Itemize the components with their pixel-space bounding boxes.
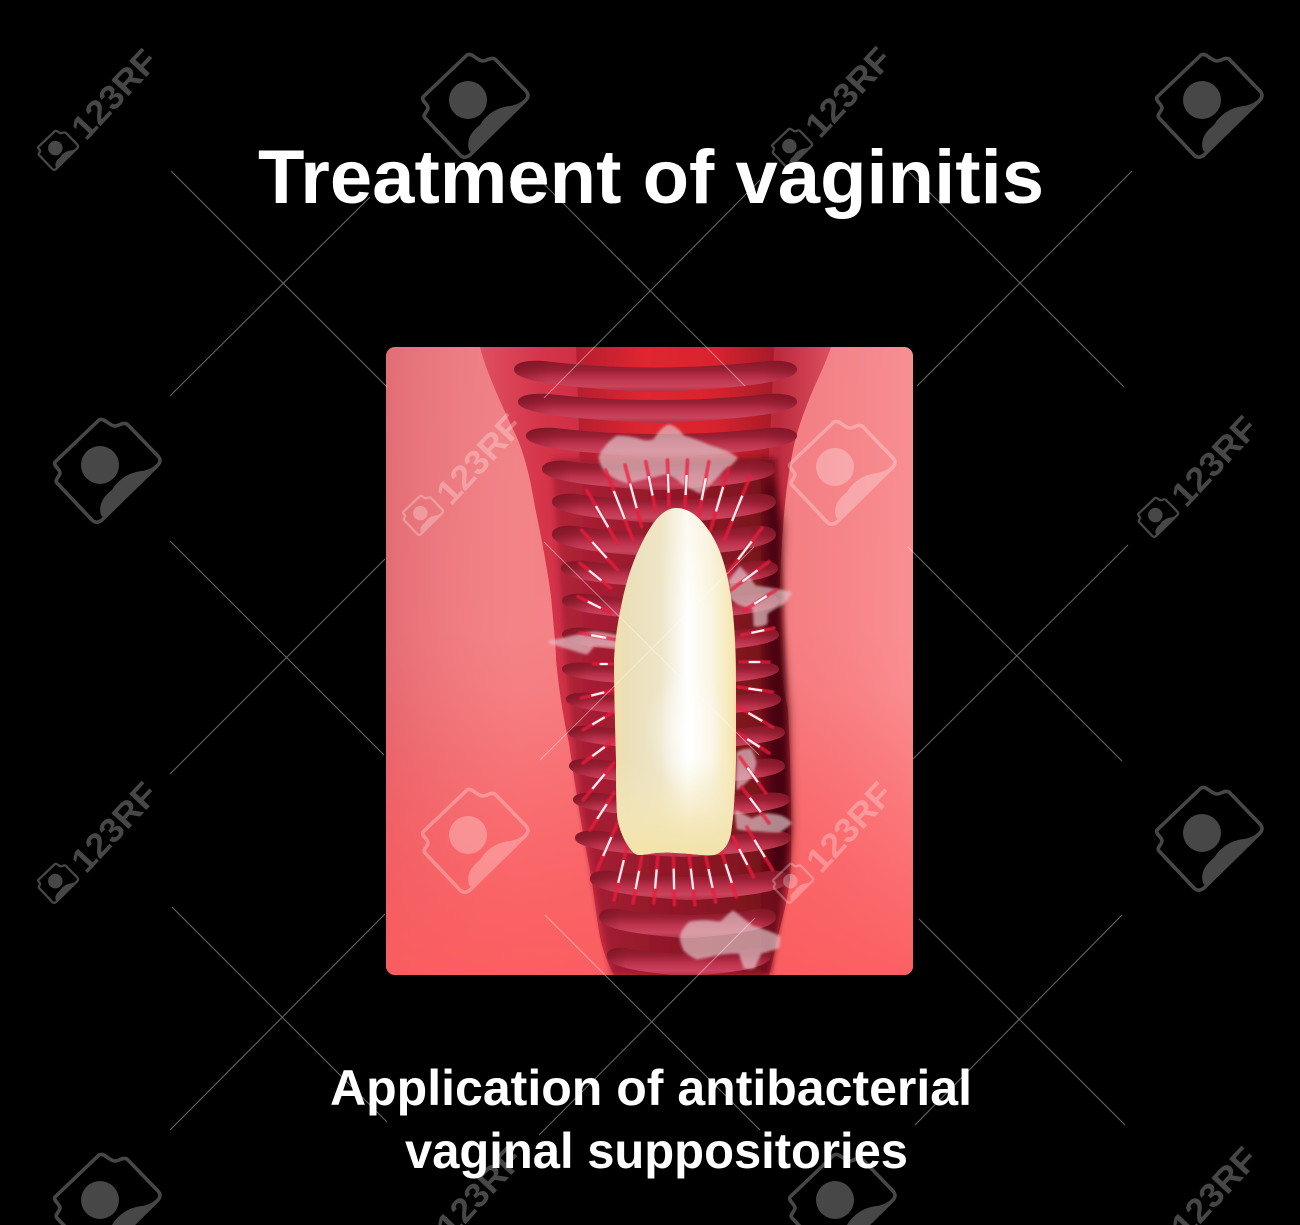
watermark: small 123RF marks: 123RF xyxy=(799,775,900,880)
caption line 1: Application of antibacterial xyxy=(330,1060,972,1116)
right wall shadow xyxy=(766,480,791,880)
patch: left xyxy=(550,633,618,653)
patch: right middle xyxy=(738,750,755,788)
discharge patches xyxy=(550,426,790,968)
patch: bottom xyxy=(681,912,779,968)
watermark: small 123RF marks: 123RF xyxy=(798,40,899,145)
caption xyxy=(330,1060,972,1179)
patch: right upper xyxy=(730,568,790,625)
suppository xyxy=(614,508,736,855)
central lumen xyxy=(576,347,774,459)
caption line 2: vaginal suppositories xyxy=(405,1123,908,1179)
lumen lower shading xyxy=(552,458,790,975)
vaginal canal wall xyxy=(480,347,831,975)
muscular rings xyxy=(514,361,797,976)
patch: top xyxy=(600,426,736,492)
panel background xyxy=(386,347,913,975)
watermark: small 123RF marks: 123RF xyxy=(429,407,530,512)
watermark: small 123RF marks: 123RF xyxy=(64,775,165,880)
title: Treatment of vaginitis xyxy=(258,135,1044,220)
medication rays: white core xyxy=(587,474,768,890)
watermark: small 123RF marks: 123RF xyxy=(1164,409,1265,514)
patch: right lower xyxy=(736,812,790,831)
watermark: small 123RF marks: 123RF xyxy=(64,42,165,147)
medication rays: red glow xyxy=(578,460,776,905)
panel: anatomical illustration xyxy=(386,347,913,976)
